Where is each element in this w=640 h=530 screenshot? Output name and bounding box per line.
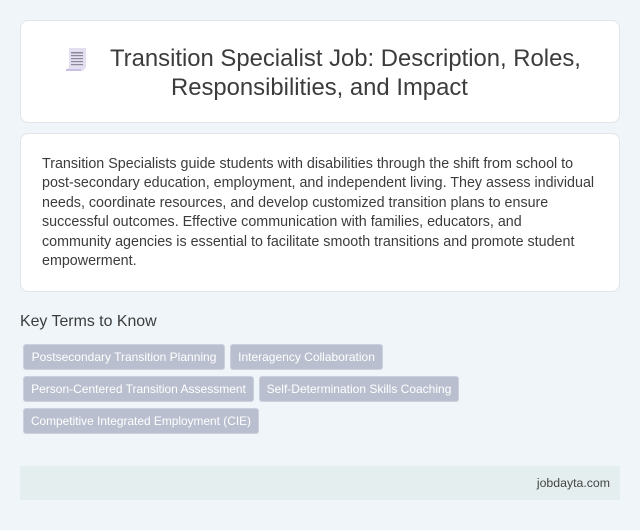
tag: Person-Centered Transition Assessment xyxy=(31,382,246,396)
title card xyxy=(20,20,620,123)
description text: community agencies is essential to facilitate smooth transitions and promote student xyxy=(42,234,574,250)
title: Transition Specialist Job: Description, Roles, xyxy=(110,45,581,72)
description text: Transition Specialists guide students with disabilities through the shift from school to xyxy=(42,156,573,172)
icon: document xyxy=(66,48,86,71)
key term tags xyxy=(23,344,459,434)
description panel xyxy=(20,133,620,292)
description text: empowerment. xyxy=(42,253,137,269)
tag xyxy=(23,376,254,402)
footer source: jobdayta.com xyxy=(537,476,610,490)
heading: key terms: Key Terms to Know xyxy=(20,313,157,330)
tag: Postsecondary Transition Planning xyxy=(32,350,216,364)
tag: Self-Determination Skills Coaching xyxy=(267,382,451,396)
tag xyxy=(259,376,459,402)
footer bar xyxy=(20,466,620,500)
tag xyxy=(230,344,383,370)
description text: post-secondary education, employment, and independent living. They assess individual xyxy=(42,175,594,191)
title: Responsibilities, and Impact xyxy=(171,74,468,101)
description text: needs, coordinate resources, and develop customized transition plans to ensure xyxy=(42,195,548,211)
tag: Interagency Collaboration xyxy=(238,350,375,364)
tag xyxy=(23,344,225,370)
tag xyxy=(23,408,259,434)
tag: Competitive Integrated Employment (CIE) xyxy=(31,414,251,428)
description text xyxy=(42,156,594,269)
title xyxy=(110,45,581,101)
description text: successful outcomes. Effective communication with families, educators, and xyxy=(42,214,522,230)
